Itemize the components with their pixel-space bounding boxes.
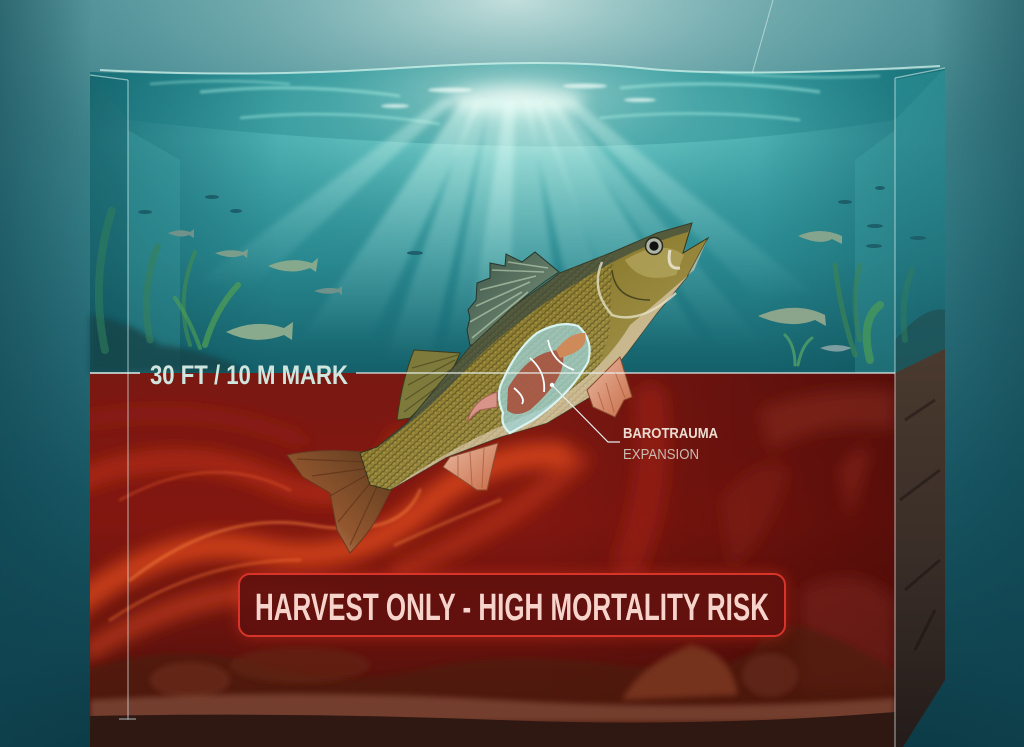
red flowing currents: [70, 400, 652, 650]
tank side panels: [90, 70, 945, 373]
body scale texture: [360, 252, 613, 490]
eye: [646, 238, 662, 254]
warning banner: [239, 574, 785, 636]
pink ventral fin: [467, 392, 497, 423]
tank frame lines: [90, 68, 945, 747]
seabed rocks: [150, 645, 798, 700]
head cheek and gill: [598, 248, 684, 317]
water volume: [90, 63, 945, 373]
tail fin: [287, 451, 391, 553]
seabed rocks right: [895, 309, 945, 373]
belly highlight: [390, 238, 708, 490]
surface ripples: [90, 63, 945, 146]
pectoral fin: [587, 357, 632, 417]
sand band: [90, 694, 895, 722]
fishing line: [708, 0, 773, 232]
depth mark: 30 FT / 10 M MARK: [150, 360, 348, 390]
dorsal fin: [467, 252, 559, 345]
seabed: [92, 627, 892, 702]
aquatic plants left: [99, 210, 238, 350]
red rock wall: [720, 389, 895, 690]
red danger zone: [70, 373, 895, 747]
barotrauma callout: [550, 383, 718, 463]
seabed rocks left: [90, 315, 250, 373]
back shading: [377, 223, 692, 447]
aquatic plants right: [785, 265, 912, 365]
body: [360, 223, 708, 490]
anal fin: [443, 443, 498, 490]
walleye fish: [287, 223, 708, 553]
light rays: [200, 100, 810, 360]
swim bladder: [467, 324, 590, 433]
warning banner: HARVEST ONLY - HIGH MORTALITY RISK: [255, 587, 769, 629]
barotrauma callout: EXPANSION: [623, 446, 699, 463]
rear dorsal fin: [397, 350, 460, 420]
barotrauma callout: BAROTRAUMA: [623, 426, 718, 442]
school of small fish: [138, 186, 926, 352]
right side face of tank, dirt cross-section: [895, 349, 945, 747]
